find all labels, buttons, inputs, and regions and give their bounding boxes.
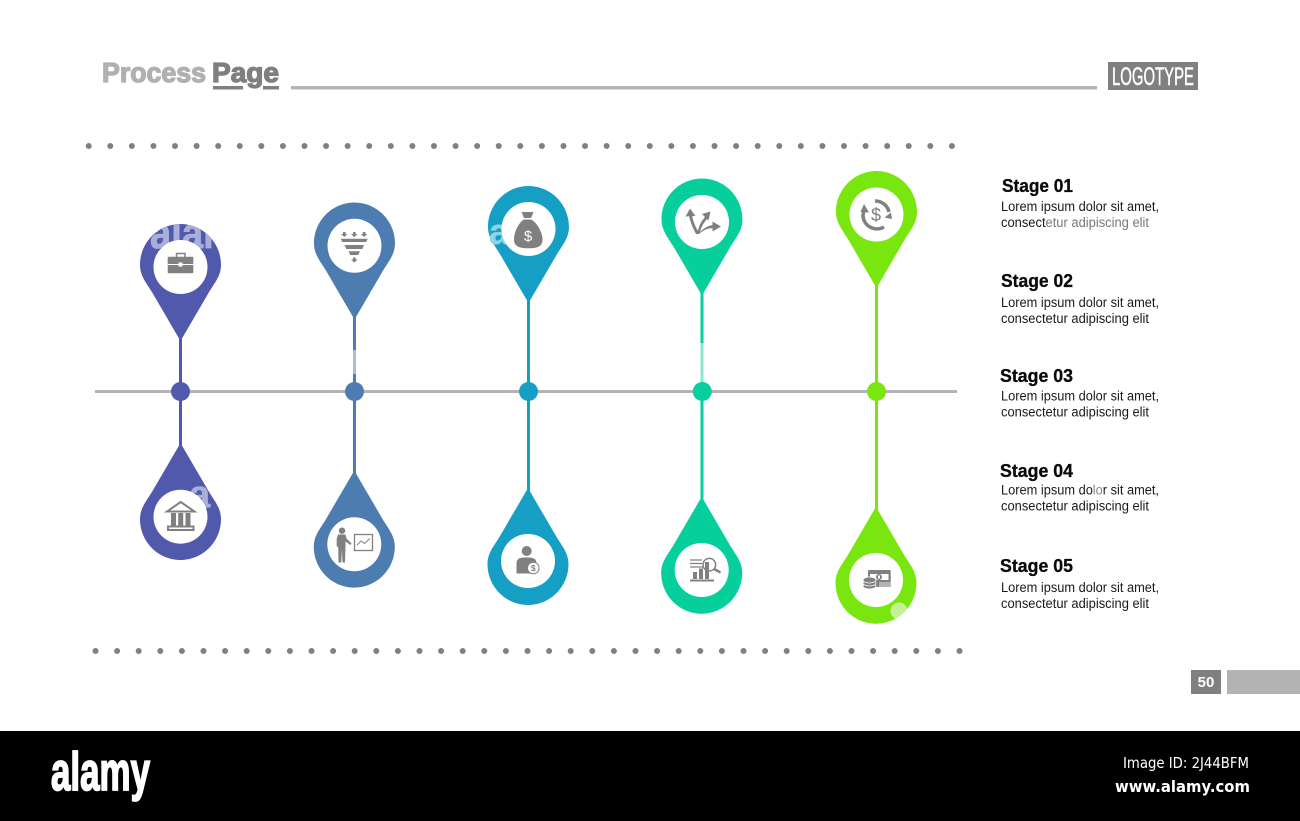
legend: stage 04: consectetur adipiscing elit — [1001, 498, 1149, 514]
logotype — [1108, 62, 1198, 91]
header rule — [291, 86, 1097, 90]
legend: stage 05: Stage 05 — [1000, 556, 1073, 576]
alamy logo: alamy — [51, 742, 150, 802]
top pin 4 — [662, 178, 742, 296]
title: Process — [102, 57, 206, 88]
icon: briefcase — [168, 254, 193, 273]
white disc bottom 1 — [154, 490, 208, 544]
connector stem 2 — [353, 316, 356, 474]
timeline node 3 — [519, 382, 538, 401]
timeline node 2 — [345, 382, 364, 401]
stage column 3 — [488, 186, 569, 605]
legend: stage 02: consectetur adipiscing elit — [1001, 311, 1149, 326]
stage column 1 — [140, 209, 221, 560]
page number — [1191, 670, 1221, 694]
white disc bottom 4 — [675, 543, 729, 597]
timeline node 4 — [693, 382, 712, 401]
white disc top 2 — [328, 219, 382, 273]
white disc top 5 — [850, 188, 904, 242]
legend: stage 01: Lorem ipsum dolor sit amet, — [1001, 199, 1159, 214]
watermark fragment on top pin 3: a — [489, 211, 510, 252]
icon: person with coin: $ — [531, 563, 536, 573]
legend: stage 01: consectetur adipiscing elit — [1001, 215, 1149, 230]
bottom pin 1 — [140, 443, 221, 560]
watermark fragment on bottom pin 1: a — [189, 474, 211, 516]
bottom pin 2 — [314, 471, 395, 588]
page number: 50 — [1198, 674, 1214, 691]
bottom dotted border — [96, 648, 960, 654]
timeline node 1 — [171, 382, 190, 401]
top pin 3 — [488, 186, 569, 303]
legend: stage 05 — [1000, 556, 1159, 611]
legend: stage 02 — [1001, 271, 1159, 326]
stage column 5 — [836, 171, 917, 624]
white disc top 3 — [502, 202, 556, 256]
white disc top 1 — [154, 240, 208, 294]
white disc bottom 3 — [501, 534, 555, 588]
icon: bank — [167, 502, 194, 530]
top pin 1 — [140, 224, 221, 341]
top pin 5 — [836, 171, 917, 288]
connector stem 1 — [179, 338, 182, 446]
image id: Image ID: 2J44BFM — [1123, 754, 1249, 772]
legend: stage 01 — [1001, 176, 1159, 230]
title: Page — [212, 57, 279, 88]
connector stem 3 — [527, 300, 530, 492]
legend: stage 04: Lorem ipsum dolor sit amet, — [1001, 482, 1159, 498]
website: www.alamy.com — [1115, 777, 1250, 796]
stage column 2 — [314, 202, 395, 588]
bottom pin 5 — [836, 507, 916, 624]
title — [102, 57, 279, 90]
legend: stage 03: Stage 03 — [1000, 366, 1073, 386]
white disc bottom 5 — [849, 553, 903, 607]
white disc bottom 2 — [327, 517, 381, 571]
legend: stage 03: consectetur adipiscing elit — [1001, 404, 1149, 420]
legend: stage 05: Lorem ipsum dolor sit amet, — [1001, 580, 1159, 595]
page tab — [1227, 670, 1300, 694]
top pin 2 — [314, 202, 395, 320]
connector stem 5 — [875, 284, 878, 510]
legend: stage 03: Lorem ipsum dolor sit amet, — [1001, 388, 1159, 404]
bottom pin 3 — [488, 488, 568, 605]
watermark footer bar — [0, 731, 1300, 821]
timeline axis — [95, 390, 957, 393]
timeline node 5 — [867, 382, 886, 401]
icon: person with coin — [516, 546, 539, 574]
icon: presenter with chart — [337, 528, 372, 562]
white disc top 4 — [675, 195, 729, 249]
stage column 4 — [661, 178, 742, 614]
connector stem 4 — [700, 292, 704, 500]
legend: stage 04 — [1000, 461, 1159, 514]
top dotted border — [89, 143, 952, 149]
icon: money bag — [514, 212, 542, 248]
legend: stage 05: consectetur adipiscing elit — [1001, 596, 1149, 611]
legend: stage 02: Lorem ipsum dolor sit amet, — [1001, 295, 1159, 310]
icon: funnel — [341, 232, 368, 262]
legend: stage 03 — [1000, 366, 1159, 420]
icon: money bag: $ — [524, 228, 533, 245]
watermark fragment on bottom pin 5 — [890, 602, 908, 620]
bottom pin 4 — [661, 497, 742, 614]
icon: dollar cycle — [860, 201, 892, 229]
icon: dollar cycle: $ — [871, 205, 881, 225]
logotype: LOGOTYPE — [1112, 63, 1194, 91]
watermark fragment on top pin 1: alar — [150, 209, 218, 258]
icon: cash and coins — [863, 570, 891, 589]
icon: diverging arrows — [686, 208, 721, 234]
legend: stage 01: Stage 01 — [1002, 176, 1073, 196]
legend: stage 04: Stage 04 — [1000, 461, 1073, 481]
icon: chart with magnifier — [690, 558, 720, 582]
legend: stage 02: Stage 02 — [1001, 271, 1073, 291]
